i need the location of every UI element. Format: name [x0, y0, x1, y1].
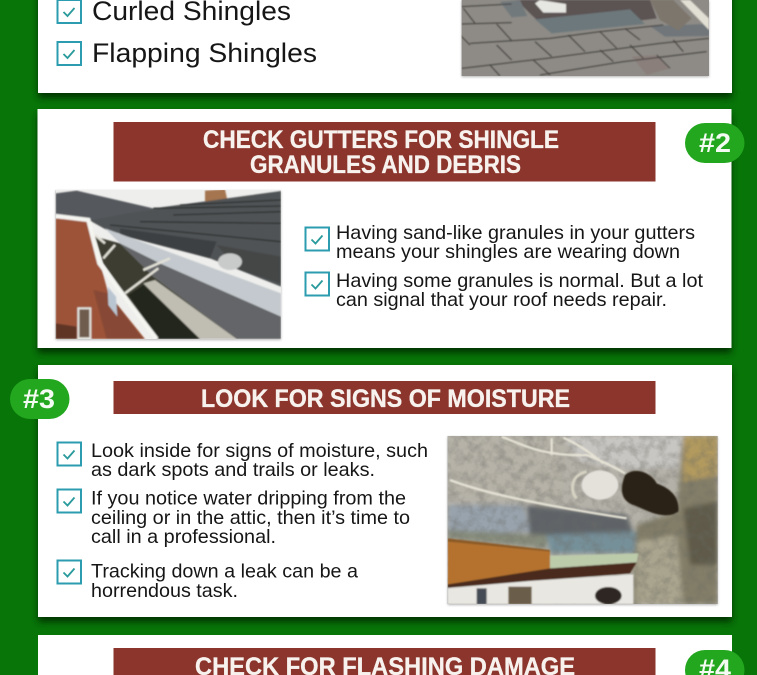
icon: checkbox water dripping: [58, 490, 81, 512]
panel: signs of moisture: [10, 365, 732, 617]
icon: checkbox dark spots: [58, 442, 81, 466]
badge: #2: [685, 123, 744, 163]
text: look inside: Look inside for signs of moisture, such: [91, 440, 428, 462]
photo: gutter with debris: [56, 189, 281, 339]
text: some granules: Having some granules is normal. But a lot: [336, 270, 704, 292]
heading banner: moisture: LOOK FOR SIGNS OF MOISTURE: [201, 385, 570, 413]
text: granules wearing: means your shingles are wearing down: [336, 241, 680, 263]
text: water dripping: [91, 488, 410, 548]
text: water dripping: call in a professional.: [91, 526, 276, 548]
icon: checkbox granules: [306, 228, 329, 250]
panel: flashing damage: [38, 635, 744, 675]
photo: moisture damage: [448, 436, 718, 604]
text: water dripping: ceiling or in the attic, then it’s time to: [91, 507, 410, 529]
heading banner: check gutters: [114, 122, 656, 182]
badge: #2: #2: [699, 128, 731, 158]
text: tracking leak: [91, 560, 358, 602]
text: granules wearing: [336, 222, 695, 263]
badge: #3: #3: [23, 384, 55, 414]
text: water dripping: If you notice water dripping from the: [91, 488, 406, 510]
text: some granules: can signal that your roof needs repair.: [336, 289, 667, 311]
badge: #3: [10, 379, 70, 419]
icon: checkbox tracking leak: [58, 560, 81, 584]
icon: checkbox curled shingles: [58, 0, 81, 23]
panel: check gutters: [38, 109, 744, 348]
text: granules wearing: Having sand-like granules in your gutters: [336, 222, 695, 244]
text: some granules: [336, 270, 704, 311]
photo: damaged shingles: [460, 0, 709, 76]
heading banner: moisture: [114, 381, 656, 414]
text: flapping shingles: Flapping Shingles: [92, 38, 317, 68]
icon: checkbox normal granules: [306, 272, 329, 296]
heading banner: check gutters: CHECK GUTTERS FOR SHINGLE: [203, 126, 559, 154]
text: tracking leak: horrendous task.: [91, 580, 238, 602]
icon: checkbox flapping shingles: [58, 42, 81, 65]
text: tracking leak: Tracking down a leak can be a: [91, 560, 358, 582]
heading banner: check gutters: GRANULES AND DEBRIS: [250, 151, 521, 179]
badge: #4: [685, 650, 744, 675]
heading banner: flashing damage: [114, 648, 656, 675]
text: look inside: as dark spots and trails or leaks.: [91, 459, 375, 481]
text: look inside: [91, 440, 428, 481]
panel: inspect shingles: [38, 0, 732, 93]
